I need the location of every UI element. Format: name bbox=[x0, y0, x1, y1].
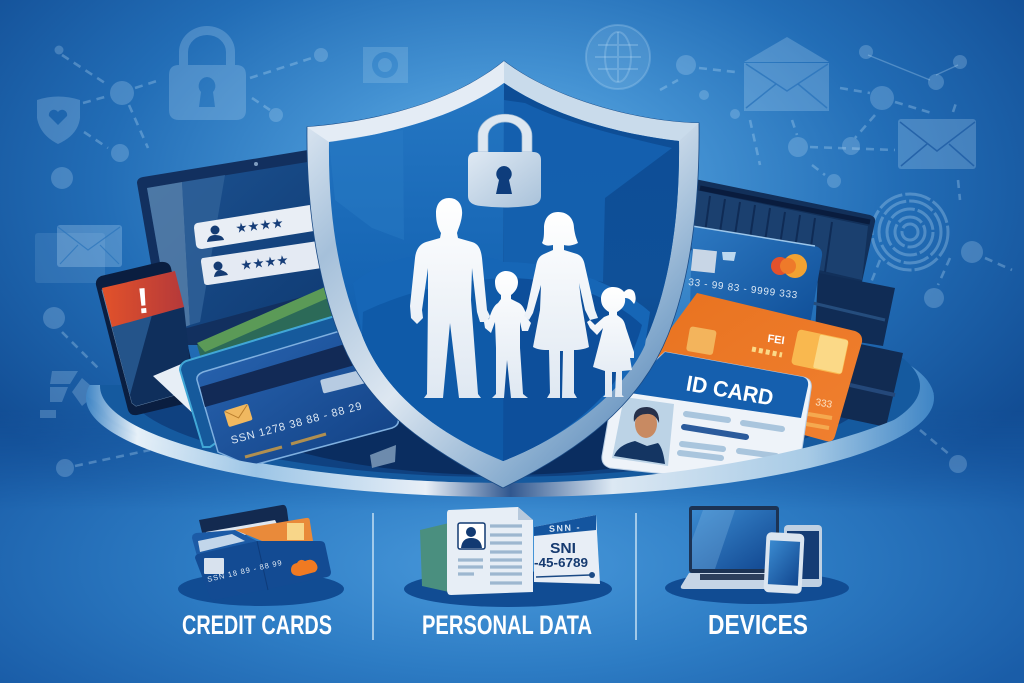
shield dark half bbox=[503, 83, 679, 461]
figure: mother bbox=[524, 212, 598, 398]
alert band bbox=[102, 271, 184, 327]
orange card: 333 bbox=[814, 397, 833, 411]
bottom ring front bbox=[87, 392, 934, 497]
right blue credit card bbox=[688, 226, 822, 325]
icon: background envelope two bbox=[898, 119, 976, 169]
login field one: ★★★★ bbox=[235, 215, 284, 236]
teal card bbox=[180, 316, 350, 447]
icon: credit cards: SSN 18 89 - 88 99 bbox=[206, 558, 283, 584]
ID lines bbox=[680, 414, 782, 458]
shield inner panel bbox=[329, 83, 679, 461]
network links bbox=[62, 55, 1012, 466]
icon: credit cards bbox=[192, 505, 331, 600]
label: DEVICES bbox=[708, 609, 808, 640]
exclamation mark: ! bbox=[135, 280, 151, 321]
icon: green card bbox=[420, 523, 449, 592]
divider right bbox=[635, 513, 637, 640]
bottom panel: devices bbox=[665, 506, 849, 640]
magnetic stripe bbox=[200, 336, 380, 407]
icon: background envelope one bbox=[744, 37, 829, 111]
icon: SSN card bbox=[534, 515, 600, 584]
label: PERSONAL DATA bbox=[422, 610, 592, 640]
icon: background globe bbox=[586, 25, 650, 89]
network nodes bbox=[43, 45, 983, 477]
ID header bbox=[623, 352, 808, 418]
back devices left: laptop bbox=[137, 148, 345, 345]
ID card bbox=[602, 352, 811, 476]
background misc shapes bbox=[40, 371, 98, 418]
divider left bbox=[372, 513, 374, 640]
card digits: 33 - 99 83 - 9999 333 bbox=[688, 277, 798, 301]
figure: father bbox=[410, 198, 490, 398]
card number: SSN 1278 38 88 - 88 29 bbox=[230, 400, 364, 447]
icon shadow bbox=[404, 571, 612, 607]
icon: background envelope left bbox=[35, 225, 122, 283]
icon: background padlock bbox=[169, 26, 246, 120]
icon: background heart shield bbox=[37, 96, 80, 144]
icon shadow bbox=[178, 572, 344, 606]
card label: FEI bbox=[767, 333, 785, 347]
orange card bbox=[640, 293, 862, 441]
card logo bbox=[771, 257, 789, 275]
icon: SSN card: -45-6789 bbox=[534, 556, 588, 570]
bottom panel: personal data bbox=[404, 507, 612, 640]
login field one bbox=[194, 204, 320, 249]
icon: SSN card: SNN - bbox=[549, 522, 581, 534]
platform ring bbox=[86, 358, 934, 497]
ID portrait bbox=[612, 397, 674, 466]
figure: boy bbox=[484, 271, 531, 398]
central shield bbox=[307, 61, 699, 488]
label: CREDIT CARDS bbox=[182, 610, 332, 640]
ID title: ID CARD bbox=[684, 371, 775, 410]
card chips bbox=[686, 326, 717, 355]
icon: background camera tile bbox=[363, 47, 408, 83]
background network pattern bbox=[35, 25, 1012, 477]
phone with alert bbox=[96, 262, 198, 415]
back dark panels right bbox=[690, 178, 903, 427]
icon: laptop bbox=[681, 506, 782, 589]
login field two: ★★★★ bbox=[240, 252, 289, 273]
padlock bbox=[468, 114, 541, 208]
icon: background fingerprint bbox=[872, 194, 948, 270]
paper sheet bbox=[153, 362, 200, 420]
shield frame bbox=[307, 61, 699, 488]
shield dome bbox=[353, 253, 650, 461]
icon: back phone bbox=[784, 525, 822, 587]
front credit card left bbox=[197, 325, 398, 466]
bottom panel: credit cards bbox=[178, 505, 344, 640]
green card bbox=[197, 287, 345, 372]
family silhouette bbox=[410, 198, 636, 398]
login field two bbox=[201, 241, 322, 285]
icon: front phone bbox=[763, 532, 805, 594]
dark objects under shield bbox=[370, 445, 396, 468]
figure: girl bbox=[587, 287, 636, 397]
envelope sticker bbox=[224, 404, 253, 427]
icon: SSN card: SNI bbox=[550, 540, 576, 557]
icon: document bbox=[447, 507, 533, 595]
icon shadow bbox=[665, 572, 849, 604]
